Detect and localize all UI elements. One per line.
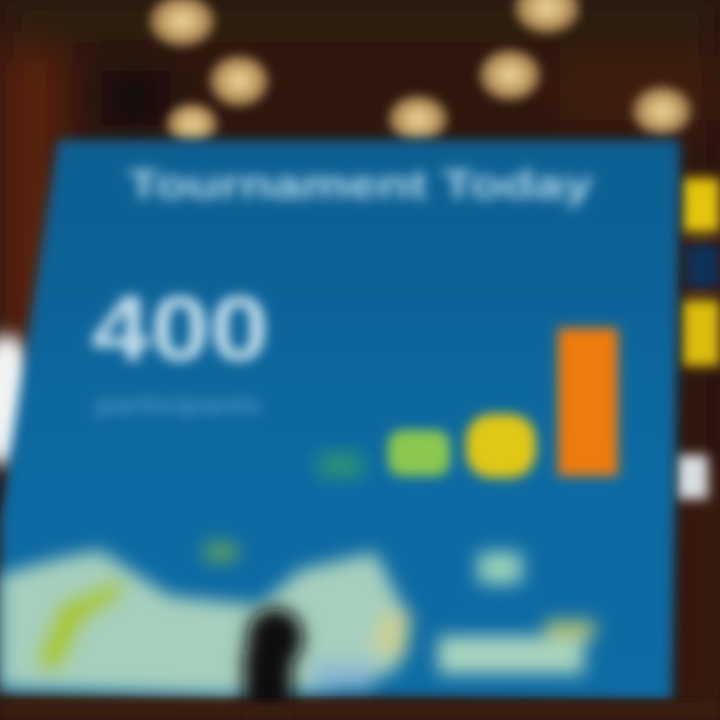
bar: yellow (466, 414, 536, 478)
title: Tournament Today (128, 163, 593, 207)
bar: dark green (318, 452, 363, 478)
bar: light green (388, 430, 450, 476)
ceiling lights (149, 0, 692, 145)
big number: 400 (91, 278, 269, 380)
number caption: participants (96, 392, 260, 419)
floor strip (0, 702, 720, 720)
bar: orange (558, 328, 618, 476)
foreground silhouette (244, 608, 303, 720)
lower illustration: pale green landscape (0, 542, 595, 695)
left white object (0, 334, 38, 466)
blue display panel (0, 140, 680, 700)
right edge yellow and navy objects (676, 178, 720, 499)
bar chart (318, 328, 618, 478)
